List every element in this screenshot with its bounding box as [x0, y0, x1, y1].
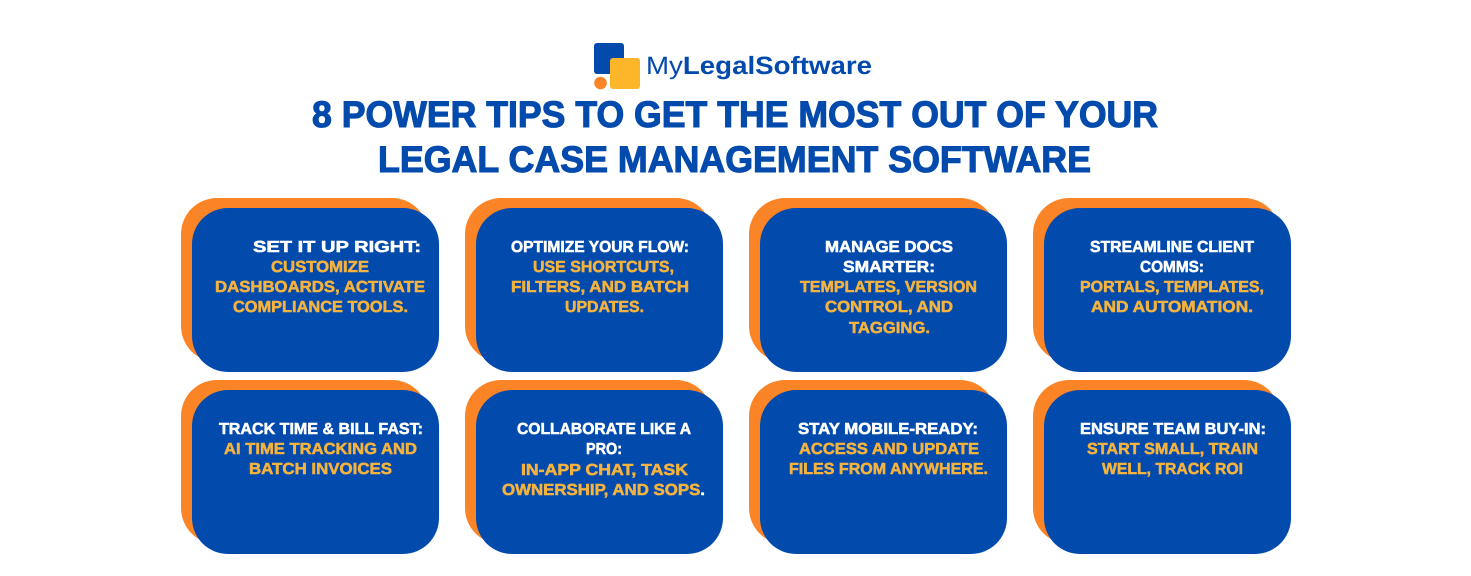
panel: stay mobile-ready	[749, 380, 1007, 554]
panel: collaborate like a pro: PRO:	[586, 441, 622, 458]
panel: stay mobile-ready: FILES FROM ANYWHERE.	[789, 461, 988, 478]
panel: set it up right: SET IT UP RIGHT:	[253, 239, 421, 256]
panel: collaborate like a pro: COLLABORATE LIKE A	[517, 421, 691, 438]
panel: ensure team buy-in	[1033, 380, 1291, 554]
panel: ensure team buy-in: WELL, TRACK ROI	[1102, 461, 1243, 478]
icon: logo squares	[594, 43, 640, 89]
panel: manage docs smarter: SMARTER:	[843, 259, 935, 276]
panel: optimize your flow	[465, 198, 723, 372]
panel: collaborate like a pro	[465, 380, 723, 554]
panel: manage docs smarter: TAGGING.	[849, 320, 930, 337]
panel: set it up right: DASHBOARDS, ACTIVATE	[215, 279, 425, 296]
panel: ensure team buy-in: START SMALL, TRAIN	[1087, 441, 1258, 458]
panel: set it up right	[181, 198, 439, 372]
panel: track time and bill fast: TRACK TIME & BILL FAST:	[219, 421, 423, 438]
panel: manage docs smarter: CONTROL, AND	[825, 299, 953, 316]
panel: ensure team buy-in: ENSURE TEAM BUY-IN:	[1080, 421, 1266, 438]
panel: set it up right: COMPLIANCE TOOLS.	[233, 299, 408, 316]
title	[312, 94, 1158, 180]
panel: track time and bill fast	[181, 380, 439, 554]
panel: streamline client comms	[1033, 198, 1291, 372]
panel: collaborate like a pro: IN-APP CHAT, TASK	[521, 462, 688, 479]
title: 8 POWER TIPS TO GET THE MOST OUT OF YOUR	[312, 94, 1158, 135]
panel: streamline client comms: AND AUTOMATION.	[1091, 299, 1253, 316]
panel: manage docs smarter	[749, 198, 1007, 372]
panel: streamline client comms: COMMS:	[1140, 259, 1204, 276]
logo wordmark: MyLegalSoftware	[646, 52, 872, 80]
panel: track time and bill fast: BATCH INVOICES	[249, 461, 392, 478]
panel: optimize your flow: OPTIMIZE YOUR FLOW:	[511, 239, 689, 256]
panel: collaborate like a pro: OWNERSHIP, AND SOPS .	[502, 482, 705, 499]
panel: optimize your flow: USE SHORTCUTS,	[533, 259, 674, 276]
panel: track time and bill fast: AI TIME TRACKING AND	[224, 441, 417, 458]
logo	[594, 43, 872, 89]
panel: streamline client comms: STREAMLINE CLIENT	[1090, 239, 1254, 256]
panel: optimize your flow: FILTERS, AND BATCH	[511, 279, 689, 296]
panel: set it up right: CUSTOMIZE	[271, 259, 369, 276]
panel: stay mobile-ready: STAY MOBILE-READY:	[798, 421, 978, 438]
panel: manage docs smarter: MANAGE DOCS	[825, 239, 953, 256]
panel: streamline client comms: PORTALS, TEMPLATES,	[1080, 279, 1264, 296]
panel: optimize your flow: UPDATES.	[565, 299, 644, 316]
panel: stay mobile-ready: ACCESS AND UPDATE	[799, 441, 979, 458]
title: LEGAL CASE MANAGEMENT SOFTWARE	[378, 139, 1091, 180]
panel: manage docs smarter: TEMPLATES, VERSION	[800, 279, 977, 296]
